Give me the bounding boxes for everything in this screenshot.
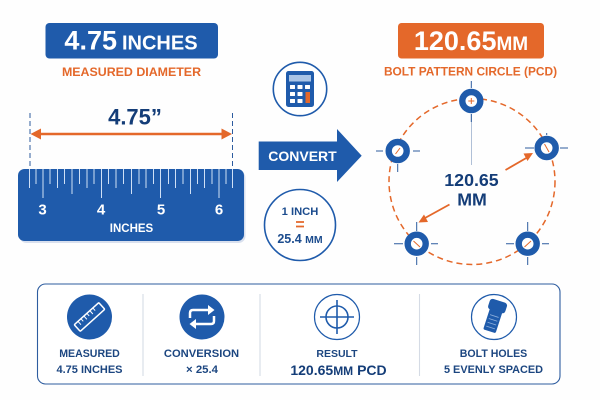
- badge: 120.65 mm: [398, 23, 544, 58]
- conversion factor circle: 25.4 MM: [277, 232, 323, 246]
- badge: measured inches: 4.75INCHES: [64, 26, 198, 56]
- summary item: conversion: × 25.4: [186, 364, 219, 376]
- badge: measured inches: [46, 23, 218, 58]
- ruler numbers: 6: [215, 202, 223, 218]
- arrow: convert: CONVERT: [268, 148, 337, 164]
- summary item: result: RESULT: [316, 348, 358, 360]
- summary item: measured: 4.75 INCHES: [56, 364, 123, 376]
- summary item: result: 120.65MM PCD: [290, 362, 387, 378]
- panel: summary: [38, 284, 560, 384]
- pitch circle: [389, 98, 555, 264]
- ruler numbers: 3: [38, 202, 47, 218]
- icon: calculator: [273, 62, 327, 116]
- ruler numbers: 5: [157, 202, 165, 218]
- summary item: measured: [56, 294, 123, 376]
- badge: 120.65 mm: 120.65MM: [414, 26, 528, 56]
- arrow: convert: [259, 129, 362, 182]
- summary item: bolt holes: BOLT HOLES: [460, 348, 527, 360]
- conversion factor circle: 1 INCH: [282, 206, 318, 218]
- summary item: bolt holes: 5 EVENLY SPACED: [444, 364, 543, 376]
- crosshair lines: [376, 81, 568, 265]
- label: bolt pattern circle: BOLT PATTERN CIRCLE (PCD): [384, 64, 557, 78]
- ruler numbers: 4: [97, 202, 106, 218]
- bolt pattern diagram: MM: [457, 190, 487, 210]
- label: measured diameter: MEASURED DIAMETER: [62, 65, 201, 79]
- bolt hole centre marks: [396, 98, 549, 247]
- bolt pattern diagram: [376, 81, 568, 265]
- ruler numbers: [38, 202, 223, 218]
- ruler: [18, 169, 246, 243]
- summary item: conversion: [164, 294, 239, 376]
- pcd value: 120.65: [444, 170, 499, 190]
- dimension: 4.75 inch span: [30, 104, 232, 167]
- conversion factor circle: [264, 190, 336, 260]
- radius arrows: [425, 157, 528, 218]
- ruler: INCHES: [110, 223, 154, 235]
- summary item: bolt holes: [444, 294, 543, 376]
- bolt holes: [389, 92, 556, 253]
- summary item: conversion: CONVERSION: [164, 348, 239, 360]
- dimension: 4.75 inch span: 4.75”: [108, 104, 162, 130]
- summary item: result: [290, 294, 387, 378]
- summary item: measured: MEASURED: [59, 348, 120, 360]
- ruler ticks: [30, 169, 232, 198]
